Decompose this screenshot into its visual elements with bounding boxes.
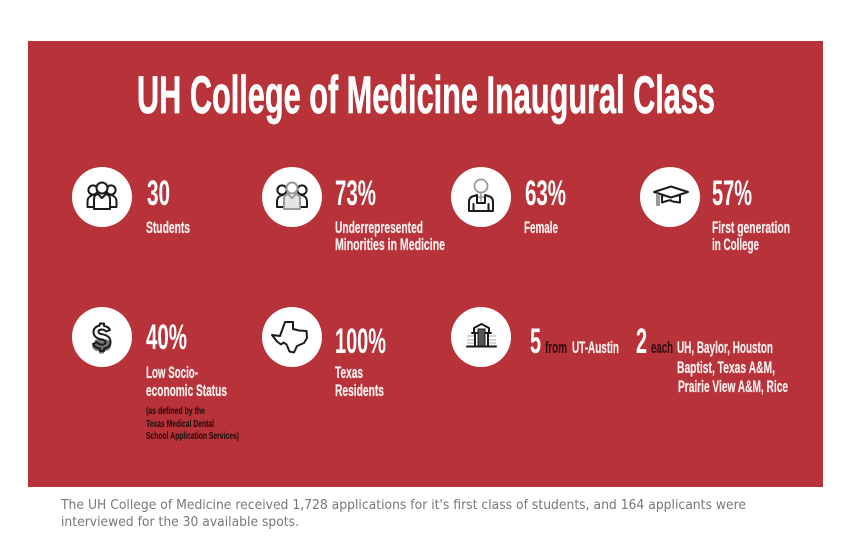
stat: schools of origin [451, 307, 788, 396]
number: 30 [147, 174, 170, 213]
label: economic Status [146, 381, 227, 400]
label [146, 363, 227, 400]
number: 63% [525, 174, 566, 213]
label: Students [146, 218, 190, 237]
icon: graduation cap [640, 167, 700, 227]
stat: 40% low socio-economic status [72, 307, 239, 442]
icon: group of students [72, 167, 132, 227]
caption: interviewed for the 30 available spots. [61, 514, 299, 530]
icon: female figure [451, 167, 511, 227]
label [712, 218, 790, 254]
number: 100% [335, 322, 386, 361]
caption [60, 497, 746, 530]
text: 5 from UT-Austin: UT-Austin [572, 338, 619, 357]
panel: red background [28, 41, 823, 487]
stat: 100% Texas residents [262, 307, 386, 400]
text: 5 from UT-Austin: 5 [530, 322, 541, 361]
number: 40% [146, 318, 187, 357]
icon: dollar sign [72, 307, 132, 367]
stat: 73% underrepresented minorities [262, 167, 445, 254]
icon: Texas outline [262, 307, 322, 367]
text: 2 each from listed schools: 2 [636, 322, 647, 361]
icon: group with highlighted person [262, 167, 322, 227]
label: First generation [712, 218, 790, 237]
text: 2 each from listed schools: each [651, 338, 673, 357]
footnote: School Application Services) [146, 430, 239, 442]
text: 2 each from listed schools: UH, Baylor, Houston [677, 338, 773, 357]
text: 2 each from listed schools [636, 322, 788, 396]
label [335, 363, 384, 400]
text: 5 from UT-Austin: from [545, 338, 567, 357]
stat: 63% female [451, 167, 566, 237]
text: 2 each from listed schools: Baptist, Texas A&M, [677, 358, 775, 377]
text: 5 from UT-Austin [530, 322, 619, 361]
label: Minorities in Medicine [335, 235, 445, 254]
footnote [146, 405, 239, 442]
label: Residents [335, 381, 384, 400]
caption: The UH College of Medicine received 1,728 applications for it's first class of students, and 164 applicants were [60, 497, 746, 513]
label: Low Socio- [146, 363, 198, 382]
label: Underrepresented [335, 218, 423, 237]
label [335, 218, 445, 254]
label: Texas [335, 363, 363, 382]
icon: university building [451, 307, 511, 367]
number: 57% [712, 174, 752, 213]
stat: 57% first generation [640, 167, 790, 254]
number: 73% [335, 174, 376, 213]
stat: 30 students [72, 167, 190, 237]
footnote: (as defined by the [146, 405, 205, 417]
label: in College [712, 235, 759, 254]
label: Female [524, 218, 558, 237]
footnote: Texas Medical Dental [146, 418, 214, 430]
